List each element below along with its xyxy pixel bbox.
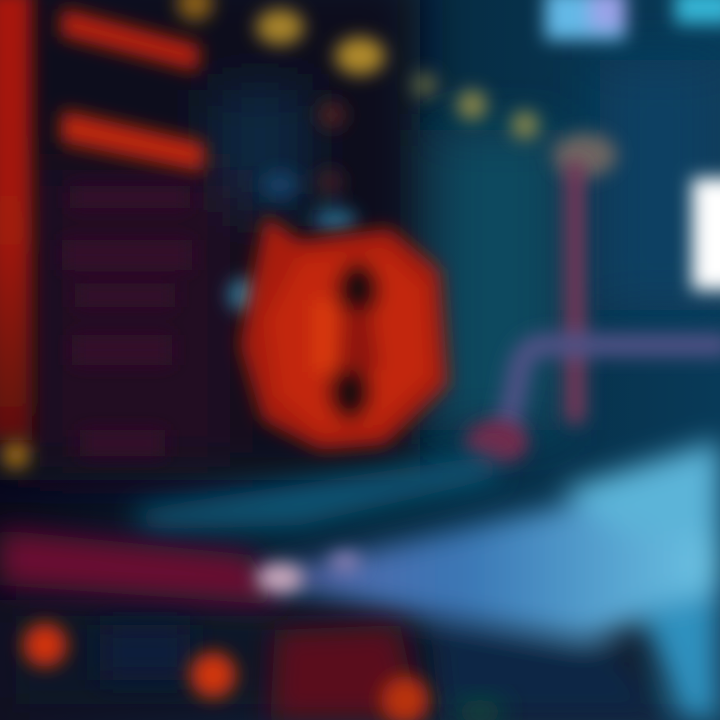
panel: left red column bbox=[0, 0, 32, 440]
icon: red warning badge bbox=[240, 215, 448, 450]
band: dark red stripe bbox=[0, 530, 280, 605]
indicator light: green bbox=[456, 698, 504, 720]
floor: blue keyboard surface bbox=[250, 440, 720, 720]
base: dark red block bbox=[270, 625, 420, 720]
small lights: center column bbox=[2, 101, 357, 469]
connector: pink and purple pipes bbox=[505, 170, 720, 435]
indicator lights: red dots bbox=[23, 623, 429, 720]
panel: white screen bbox=[692, 178, 720, 290]
list: purple bars bbox=[62, 186, 192, 456]
highlights: pale spots bbox=[256, 552, 361, 593]
panel: lights top right bbox=[545, 0, 720, 40]
dot trail: yellow lights bbox=[177, 0, 617, 177]
shelf: teal edge bbox=[130, 455, 500, 530]
base: navy block bbox=[100, 625, 190, 680]
connector node bbox=[465, 420, 529, 464]
list: red bars bbox=[60, 8, 205, 172]
